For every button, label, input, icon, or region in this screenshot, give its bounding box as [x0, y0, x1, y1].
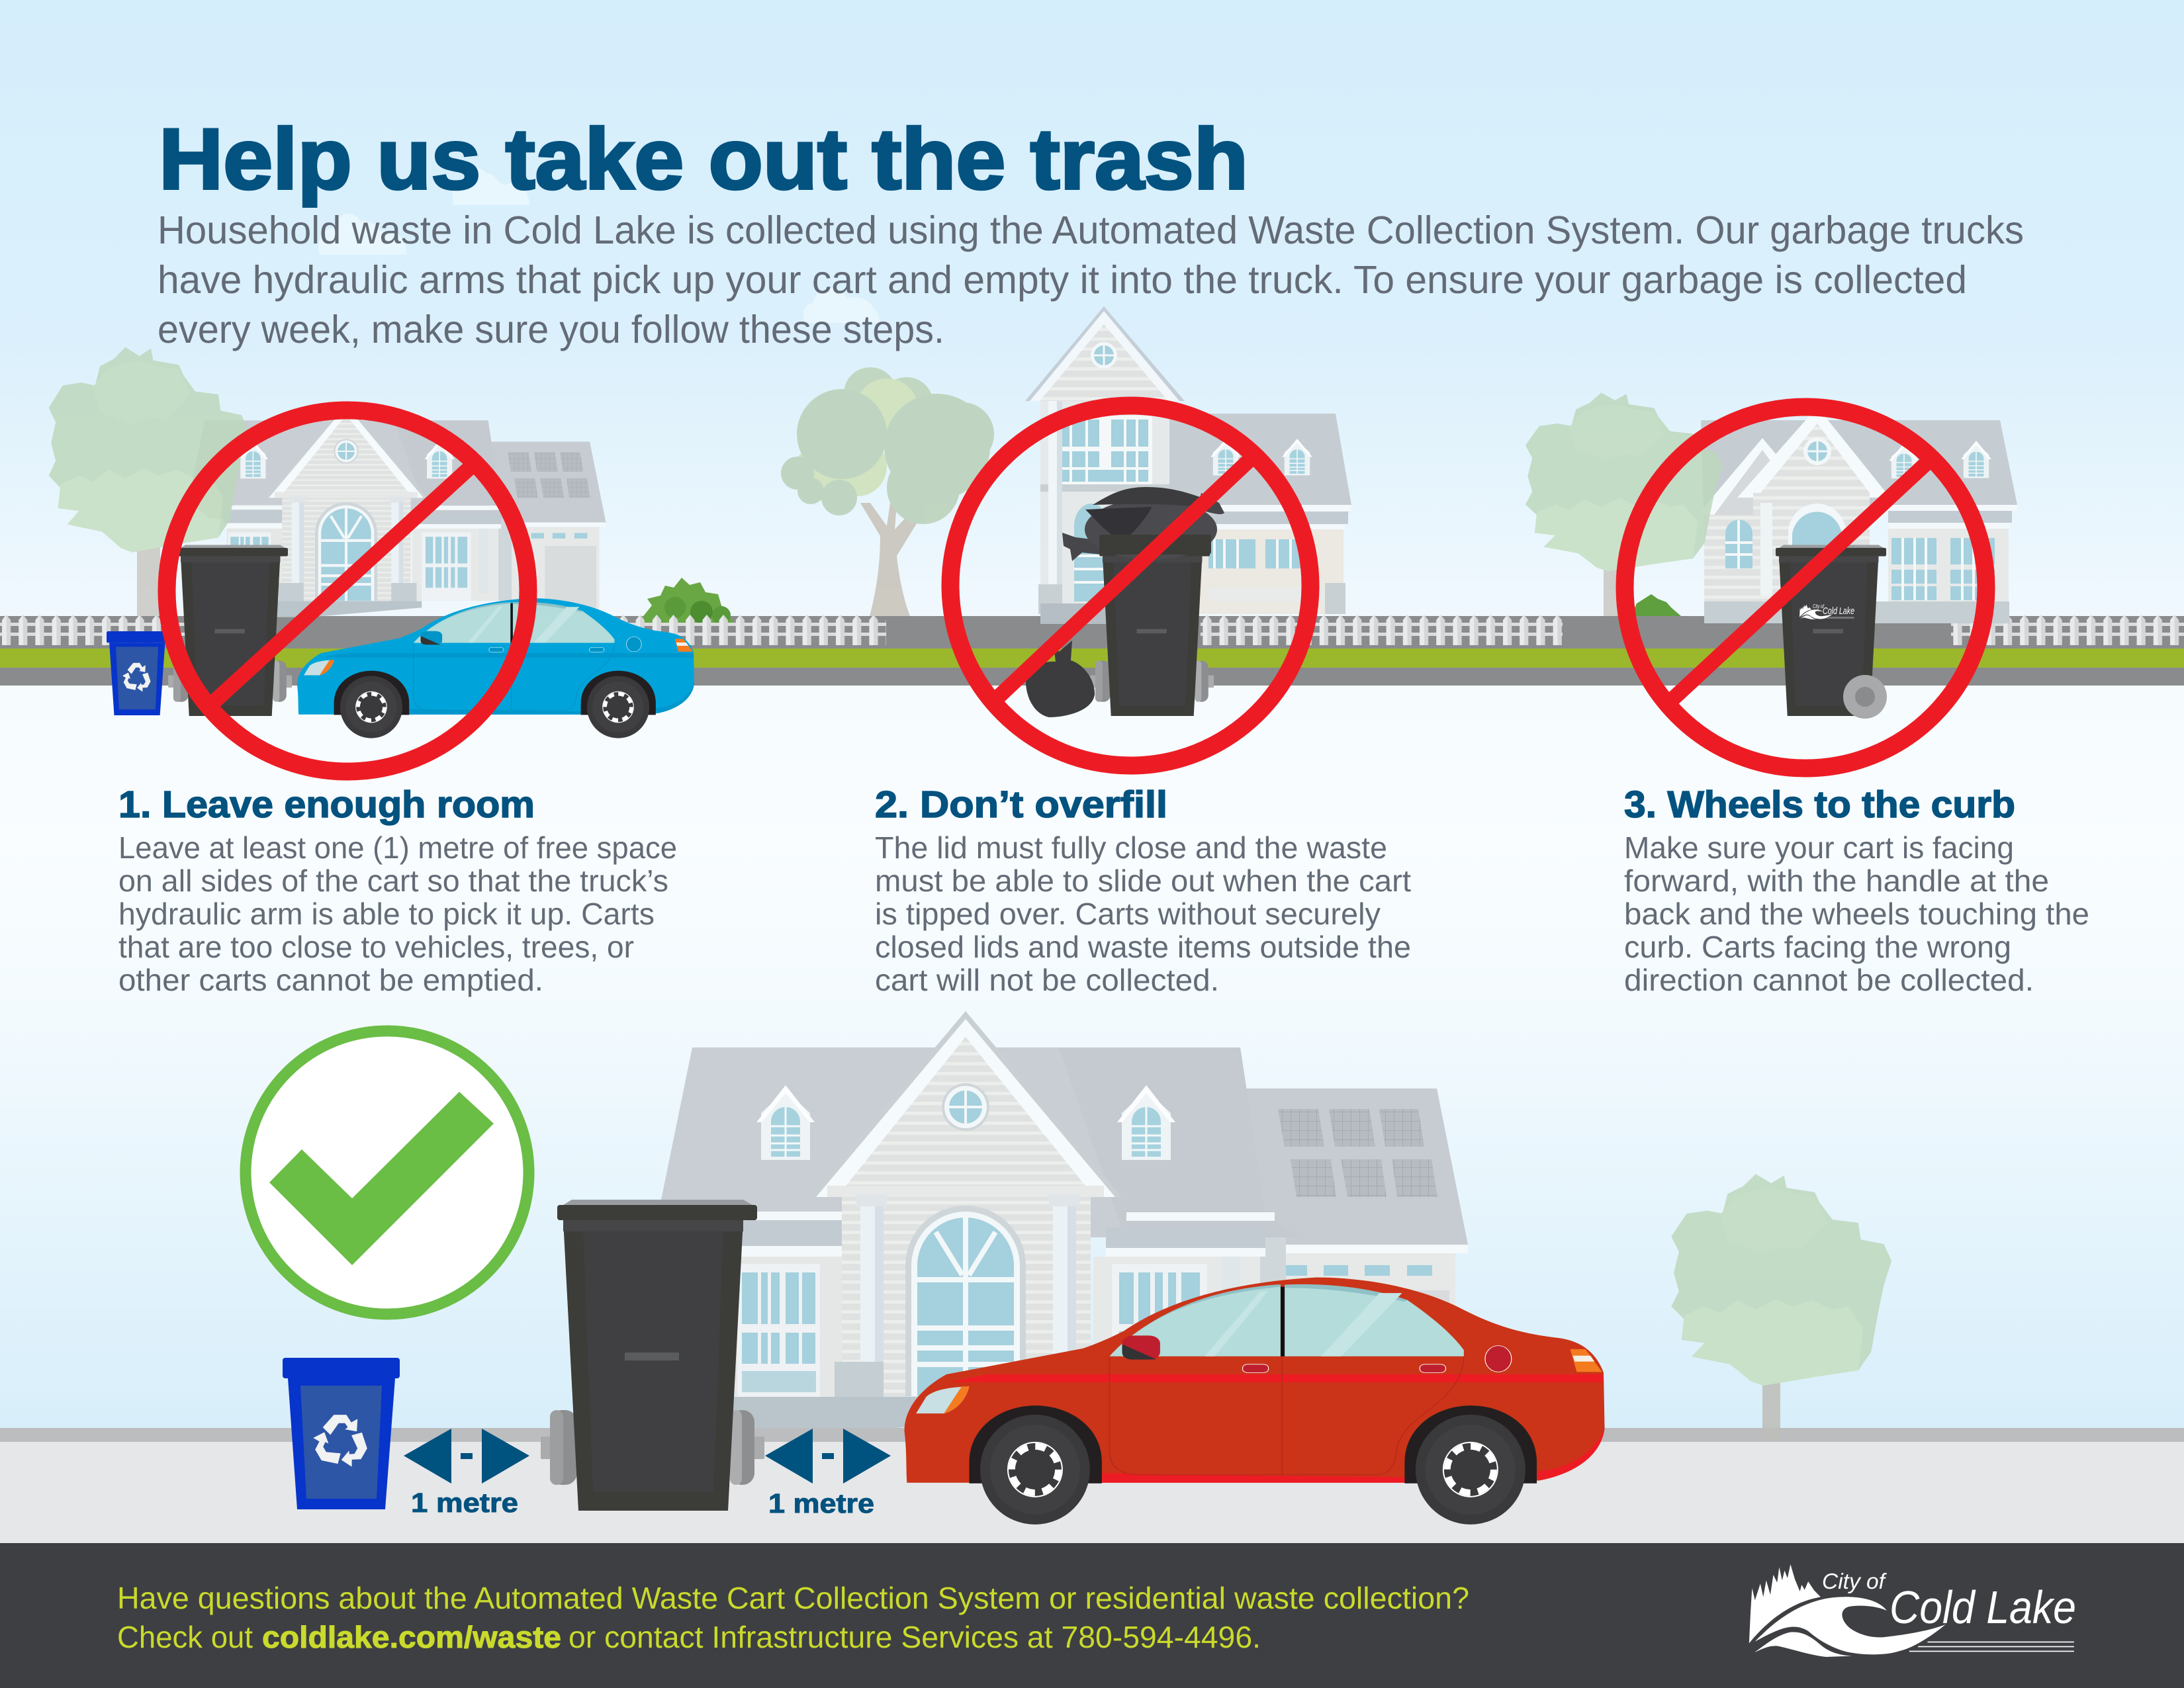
- step three text: [1624, 783, 2089, 997]
- step three body: back and the wheels touching the: [1624, 897, 2089, 931]
- tree, step one: [49, 347, 248, 616]
- step two body: The lid must fully close and the waste: [875, 830, 1387, 865]
- prohibition sign one: [167, 410, 528, 772]
- step two text: [875, 783, 1411, 997]
- step one body: [118, 830, 677, 997]
- step three body: [1624, 830, 2089, 997]
- step three body: curb. Carts facing the wrong: [1624, 930, 2011, 964]
- step two body: is tipped over. Carts without securely: [875, 897, 1381, 931]
- intro paragraph: Household waste in Cold Lake is collected using the Automated Waste Collection System. Our garbage trucks: [158, 208, 2024, 252]
- footer text: Check out: [117, 1620, 253, 1654]
- title: Help us take out the trash: [159, 111, 1248, 207]
- one metre arrow, left: 1 metre: [411, 1488, 518, 1518]
- intro paragraph: every week, make sure you follow these steps.: [158, 308, 944, 351]
- large house: [660, 1011, 1468, 1428]
- shrub, street three: [1631, 594, 1681, 616]
- cart logo: City of: [1813, 603, 1825, 609]
- cart logo: [1799, 603, 1854, 619]
- tree, step three: [1525, 392, 1723, 616]
- step three body: Make sure your cart is facing: [1624, 830, 2014, 865]
- tree, lower right: [1671, 1174, 1891, 1441]
- black cart with city logo: [1776, 545, 1886, 716]
- City of Cold Lake logo: [1749, 1564, 2076, 1657]
- step one body: hydraulic arm is able to pick it up. Carts: [118, 897, 655, 931]
- footer text: [117, 1581, 1469, 1654]
- step one body: on all sides of the cart so that the truck’s: [118, 864, 668, 898]
- footer bar: [0, 1543, 2184, 1688]
- footer text: or contact Infrastructure Services at 780-594-4496.: [569, 1620, 1261, 1654]
- icon: blue recycling cart: [107, 631, 167, 715]
- large blue recycling cart: [283, 1358, 400, 1509]
- step one body: Leave at least one (1) metre of free space: [118, 830, 677, 865]
- ground: curb and sidewalk: [0, 1428, 2184, 1543]
- cart logo: Cold Lake: [1823, 605, 1854, 617]
- garbage bag overflowing: [1062, 487, 1224, 561]
- City of Cold Lake logo: Cold Lake: [1889, 1581, 2076, 1633]
- step two body: [875, 830, 1411, 997]
- prohibition sign three: [1625, 407, 1986, 768]
- loose garbage bag: [1026, 640, 1095, 717]
- clouds: [318, 168, 881, 323]
- step two illustration: overfilled cart: [1026, 487, 1224, 717]
- cart side wheel: [1843, 675, 1887, 719]
- check mark badge: [246, 1031, 529, 1314]
- step three heading: 3. Wheels to the curb: [1624, 783, 2015, 826]
- overfilled black cart: [1090, 545, 1214, 716]
- step one body: that are too close to vehicles, trees, or: [118, 930, 634, 964]
- house, step three: [1698, 407, 2017, 623]
- step three illustration: cart facing the wrong way: [1776, 545, 1887, 719]
- house, step one: [189, 402, 606, 617]
- intro paragraph: have hydraulic arms that pick up your cart and empty it into the truck. To ensure your garbage is collected: [158, 258, 1967, 302]
- step one heading: 1. Leave enough room: [118, 783, 535, 826]
- step three body: forward, with the handle at the: [1624, 864, 2049, 898]
- step three body: direction cannot be collected.: [1624, 963, 2034, 997]
- road bands: upper street: [0, 616, 2184, 686]
- tree, step two: [781, 367, 994, 616]
- one metre arrow, right: 1 metre: [768, 1488, 874, 1519]
- red car: [905, 1278, 1605, 1525]
- step two body: closed lids and waste items outside the: [875, 930, 1411, 964]
- step one text: [118, 783, 677, 997]
- large black cart: [541, 1200, 764, 1511]
- footer text: coldlake.com/waste: [262, 1620, 561, 1654]
- shrub, street one: [638, 578, 734, 625]
- step one illustration: carts and car: [107, 545, 694, 738]
- step two body: must be able to slide out when the cart: [875, 864, 1411, 898]
- house, step two: [1025, 306, 1351, 624]
- step one body: other carts cannot be emptied.: [118, 963, 543, 997]
- black cart with wheels: [168, 545, 292, 716]
- step two heading: 2. Don’t overfill: [875, 783, 1167, 826]
- City of Cold Lake logo: City of: [1822, 1569, 1888, 1593]
- prohibition sign two: [950, 406, 1310, 766]
- one metre arrow, right: [765, 1429, 891, 1519]
- intro paragraph: [158, 208, 2024, 351]
- footer text: Have questions about the Automated Waste Cart Collection System or residential waste collection?: [117, 1581, 1469, 1615]
- picket fences: [0, 615, 2184, 646]
- one metre arrow, left: [404, 1429, 529, 1518]
- blue car: [297, 598, 694, 738]
- step two body: cart will not be collected.: [875, 963, 1219, 997]
